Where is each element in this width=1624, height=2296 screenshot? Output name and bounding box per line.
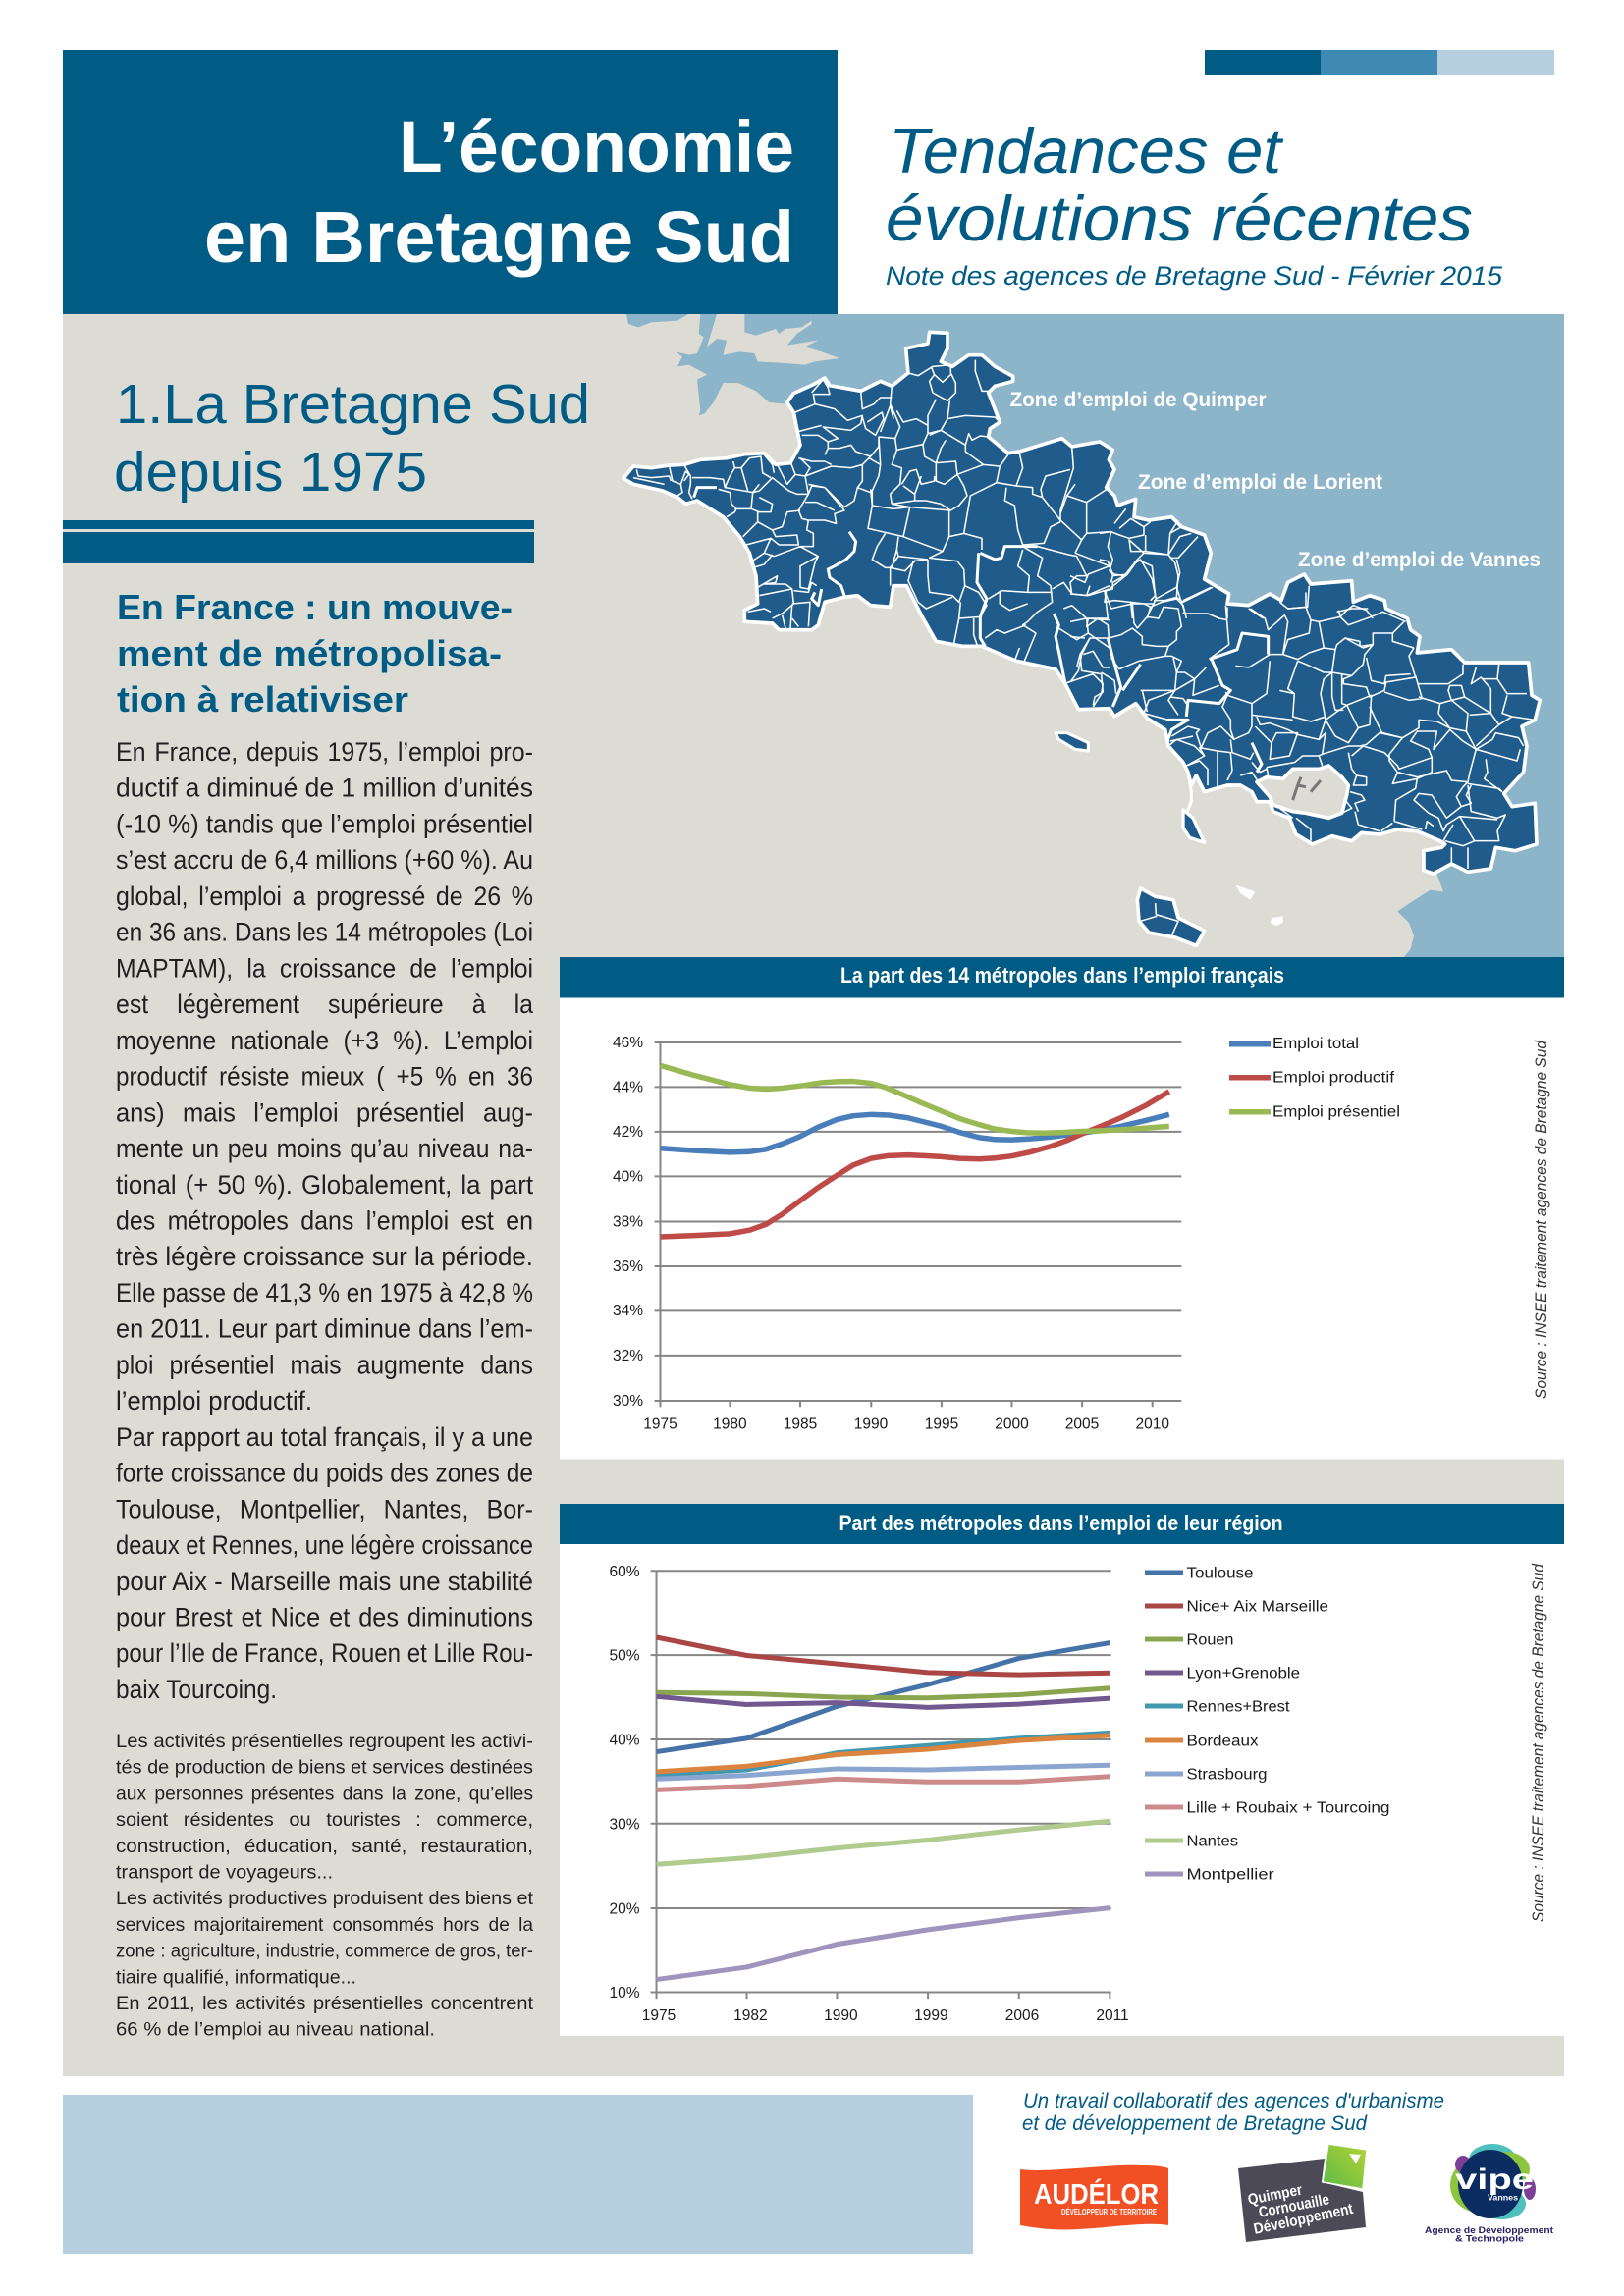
definitions note: En 2011, les activités présentielles concentrent (116, 1993, 534, 2014)
chart 1 x axis: 2000 (995, 1415, 1029, 1433)
panel: chart 2 (560, 1504, 1564, 2036)
body text: s’est accru de 6,4 millions (+60 %). Au (116, 845, 533, 875)
chart 1 legend: Emploi présentiel (1272, 1104, 1400, 1121)
chart 2 x axis: 1982 (733, 2007, 768, 2024)
bays on the north coast (626, 314, 812, 336)
chart 1 header: La part des 14 métropoles dans l’emploi français (840, 963, 1284, 988)
body text: forte croissance du poids des zones de (116, 1459, 533, 1488)
chart 1 y axis: 40% (613, 1168, 643, 1186)
sub-heading: tion à relativiser (117, 679, 408, 720)
body text: baix Tourcoing. (116, 1675, 277, 1704)
definitions note (116, 1731, 534, 2041)
chart 1 x axis: 1995 (925, 1415, 958, 1433)
chart 2 x axis: 2011 (1096, 2007, 1129, 2024)
section heading: 1.La Bretagne Sud (116, 373, 590, 436)
communes of the Lorient north area (1100, 508, 1368, 618)
sea (676, 314, 1564, 957)
line chart: metropoles share of regional employment (651, 1571, 1111, 1999)
definitions note: tiaire qualifié, informatique... (116, 1966, 356, 1988)
sub-heading: En France : un mouve- (117, 587, 513, 627)
Belle-Ile (1137, 888, 1205, 945)
chart 2 x axis: 1975 (642, 2007, 676, 2024)
logo: Quimper Cornouaille Developpement (1238, 2144, 1367, 2242)
body text: ploi présentiel mais augmente dans (116, 1350, 533, 1379)
chart 1 y axis: 46% (613, 1035, 643, 1051)
subtitle (886, 115, 1503, 291)
body text: Elle passe de 41,3 % en 1975 à 42,8 % (116, 1278, 533, 1308)
definitions note: zone : agriculture, industrie, commerce de gros, ter- (116, 1941, 533, 1962)
chart 2 legend (1145, 1565, 1390, 1883)
footer credit (1022, 2090, 1444, 2135)
chart 1 y axis: 32% (613, 1348, 643, 1364)
subtitle: Tendances et (889, 115, 1284, 187)
body text: global, l’emploi a progressé de 26 % (116, 881, 533, 911)
chart 2 x axis: 1999 (914, 2007, 948, 2024)
chart 2 x axis: 2006 (1005, 2007, 1039, 2024)
chart 1 x axis: 2010 (1135, 1415, 1169, 1433)
chart 2 y axis (609, 1564, 640, 2002)
chart 1 x axis: 1980 (713, 1415, 747, 1433)
definitions note: construction, éducation, santé, restauration, (116, 1836, 533, 1857)
chart 2 y axis: 50% (609, 1647, 640, 1665)
body text: pour Brest et Nice et des diminutions (116, 1602, 533, 1631)
chart 2 y axis: 60% (609, 1564, 640, 1580)
definitions note: aux personnes présentes dans la zone, qu’elles (116, 1783, 533, 1804)
chart 1 x axis (643, 1415, 1169, 1433)
definitions note: transport de voyageurs... (116, 1861, 333, 1883)
logo: Quimper Cornouaille Developpement: Cornouaille (1258, 2191, 1331, 2221)
body text: ans) mais l’emploi présentiel aug- (116, 1097, 533, 1127)
body text: en 36 ans. Dans les 14 métropoles (Loi (116, 918, 533, 947)
body text: productif résiste mieux ( +5 % en 36 (116, 1062, 533, 1092)
body text: des métropoles dans l’emploi est en (116, 1205, 533, 1235)
chart 1 y axis: 42% (613, 1124, 643, 1141)
decorative colour bars (1205, 50, 1554, 75)
chart 1 header (560, 957, 1564, 997)
logo: VIPE: Vannes (1488, 2194, 1519, 2203)
body text (116, 737, 534, 1704)
body text: Par rapport au total français, il y a une (116, 1422, 533, 1452)
map labels (1009, 389, 1541, 571)
section heading (114, 373, 590, 504)
chart 2 source: Source : INSEE traitement agences de Bretagne Sud (1530, 1563, 1547, 1922)
section heading: depuis 1975 (114, 441, 427, 504)
chart 2 legend: Lyon+Grenoble (1186, 1665, 1300, 1682)
chart 2 x axis (642, 2007, 1129, 2024)
subtitle: Note des agences de Bretagne Sud - Février 2015 (886, 261, 1503, 291)
employment zones (623, 332, 1540, 874)
chart 1 y axis: 36% (613, 1258, 643, 1275)
body text: tional (+ 50 %). Globalement, la part (116, 1170, 533, 1200)
map labels: Zone d’emploi de Quimper (1009, 389, 1267, 411)
chart 1 legend: Emploi total (1272, 1036, 1359, 1052)
section rule (63, 520, 534, 563)
chart 1 x axis: 1985 (784, 1415, 817, 1433)
map labels: Zone d’emploi de Vannes (1298, 549, 1541, 571)
body text: l’emploi productif. (116, 1386, 312, 1415)
body text: ductif a diminué de 1 million d’unités (116, 774, 533, 803)
chart 2 y axis: 30% (609, 1816, 640, 1834)
body text: pour Aix - Marseille mais une stabilité (116, 1567, 533, 1596)
definitions note: soient résidentes ou touristes : commerce, (116, 1809, 533, 1831)
body text: (-10 %) tandis que l’emploi présentiel (116, 809, 533, 838)
islands of Houat and Hoedic (1235, 885, 1283, 926)
definitions note: Les activités présentielles regroupent les activi- (116, 1731, 533, 1752)
chart 2 header (560, 1504, 1564, 1544)
grey background panel (63, 314, 1564, 2076)
panel: chart 1 (560, 957, 1564, 1459)
body text: Toulouse, Montpellier, Nantes, Bor- (116, 1494, 533, 1523)
chart 2 legend: Lille + Roubaix + Tourcoing (1186, 1800, 1390, 1816)
chart 1 source: Source : INSEE traitement agences de Bretagne Sud (1533, 1040, 1550, 1399)
body text: mente un peu moins qu’au niveau na- (116, 1134, 533, 1163)
chart 1 y axis (613, 1035, 643, 1410)
logo: VIPE: vipe (1455, 2163, 1534, 2196)
subtitle: évolutions récentes (886, 183, 1473, 254)
chart 2 legend: Toulouse (1186, 1565, 1253, 1582)
footer credit: Un travail collaboratif des agences d'urbanisme (1023, 2090, 1444, 2112)
estuaries, east (1108, 633, 1269, 818)
body text: MAPTAM), la croissance de l’emploi (116, 953, 533, 983)
chart 1 legend (1229, 1036, 1400, 1121)
chart 2 y axis: 40% (609, 1732, 640, 1749)
sub-heading: ment de métropolisa- (117, 633, 502, 673)
chart 2 legend: Montpellier (1186, 1867, 1274, 1883)
chart 1 y axis: 38% (613, 1213, 643, 1231)
logo: VIPE: Agence de Développement (1425, 2225, 1554, 2236)
communes, west and centre (633, 360, 1110, 707)
body text: est légèrement supérieure à la (116, 989, 534, 1019)
chart 2 legend: Bordeaux (1186, 1734, 1259, 1749)
estuaries, west and centre (694, 488, 1065, 684)
chart 1 x axis: 2005 (1065, 1415, 1099, 1433)
title block: L’économie (399, 106, 794, 187)
map labels: Zone d’emploi de Lorient (1138, 471, 1382, 494)
line chart: metropoles share of French employment (655, 1042, 1181, 1407)
chart 2 legend: Rouen (1186, 1631, 1233, 1649)
chart 1 x axis: 1990 (854, 1415, 889, 1433)
gulf of Morbihan (1257, 766, 1348, 818)
chart 1 x axis: 1975 (643, 1415, 677, 1433)
chart 2 legend: Rennes+Brest (1186, 1698, 1290, 1716)
chart 2 y axis: 20% (609, 1900, 640, 1918)
panel: map of Bretagne Sud (623, 314, 1564, 957)
footer blue box (63, 2095, 973, 2254)
body text: pour l’Ile de France, Rouen et Lille Rou- (116, 1638, 533, 1668)
title block (63, 50, 838, 314)
chart 1 y axis: 34% (613, 1303, 643, 1319)
logo: VIPE (1425, 2144, 1554, 2244)
chart 2 x axis: 1990 (824, 2007, 858, 2024)
peninsula of Quiberon (1183, 810, 1205, 842)
chart 1 legend: Emploi productif (1272, 1070, 1395, 1087)
chart 2 header: Part des métropoles dans l’emploi de leur région (839, 1511, 1282, 1535)
footer credit: et de développement de Bretagne Sud (1022, 2112, 1368, 2135)
sub-heading (117, 587, 513, 720)
chart 2 legend: Nantes (1186, 1834, 1238, 1849)
body text: En France, depuis 1975, l’emploi pro- (116, 737, 533, 767)
logo: VIPE: & Technopole (1455, 2234, 1524, 2244)
title block: en Bretagne Sud (204, 196, 794, 278)
body text: très légère croissance sur la période. (116, 1242, 533, 1271)
island of Groix (1056, 733, 1088, 751)
definitions note: 66 % de l’emploi au niveau national. (116, 2019, 435, 2041)
chart 2 legend: Nice+ Aix Marseille (1186, 1598, 1328, 1616)
islands of the gulf (1293, 777, 1321, 800)
chart 1 y axis: 30% (613, 1393, 643, 1410)
body text: moyenne nationale (+3 %). L’emploi (116, 1026, 533, 1055)
body text: deaux et Rennes, une légère croissance (116, 1530, 533, 1560)
chart 1 y axis: 44% (613, 1080, 643, 1095)
logo: Audelor: AUDÉLOR (1034, 2177, 1159, 2211)
chart 2 y axis: 10% (609, 1985, 640, 2002)
definitions note: tés de production de biens et services destinées (116, 1757, 533, 1779)
communes, east (1070, 560, 1535, 945)
logo: Audelor (1020, 2165, 1168, 2229)
logo: Audelor: DÉVELOPPEUR DE TERRITOIRE (1061, 2208, 1158, 2216)
definitions note: Les activités productives produisent des biens et (116, 1888, 534, 1909)
chart 2 legend: Strasbourg (1186, 1767, 1267, 1783)
definitions note: services majoritairement consommés hors de la (116, 1914, 533, 1936)
body text: en 2011. Leur part diminue dans l’em- (116, 1314, 533, 1344)
logo: Quimper Cornouaille Developpement: Quimper (1247, 2182, 1304, 2209)
logo: Quimper Cornouaille Developpement: Développement (1252, 2201, 1355, 2238)
